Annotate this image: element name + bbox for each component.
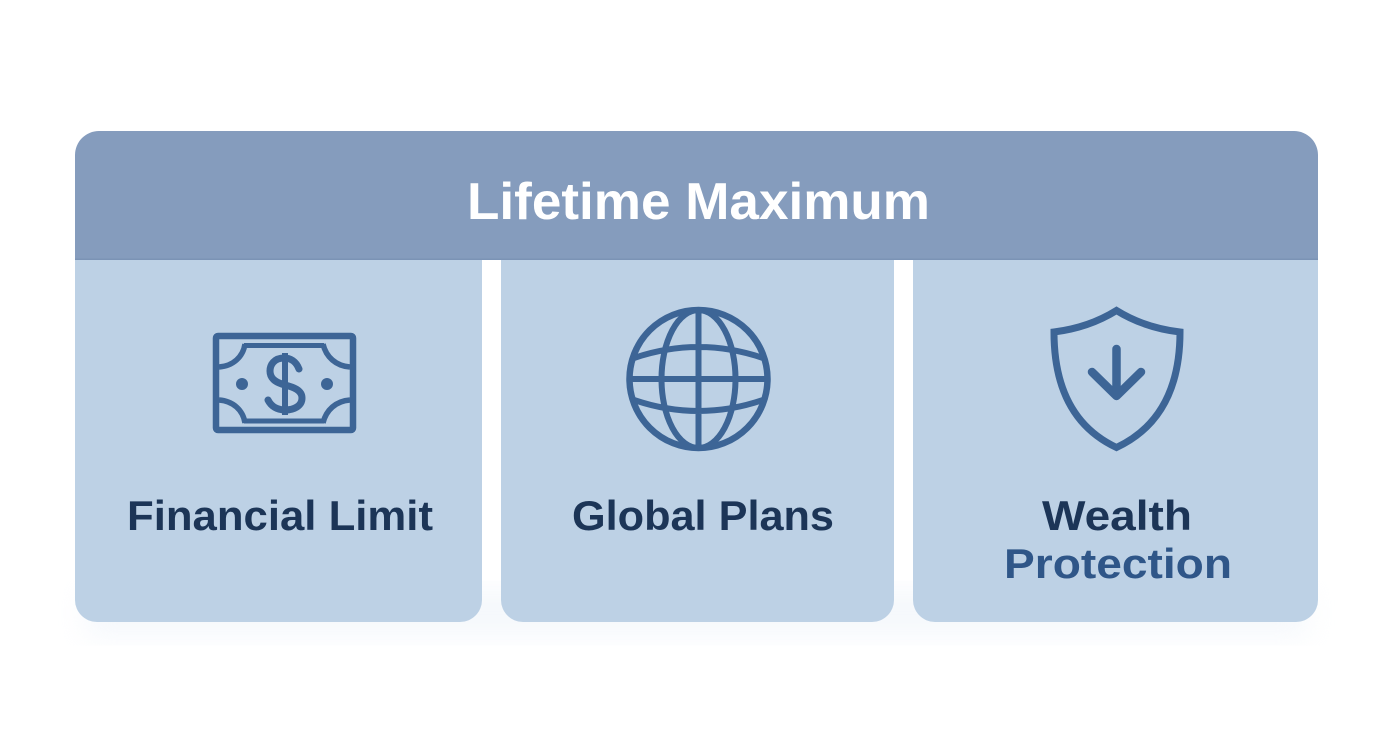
panel: wealth protection bbox=[913, 259, 1318, 622]
icon: shield with down arrow bbox=[1054, 310, 1180, 448]
label: protection: Protection bbox=[1004, 540, 1232, 587]
icon: globe bbox=[629, 310, 768, 448]
panel: global plans bbox=[501, 259, 894, 622]
label: global plans: Global Plans bbox=[572, 492, 834, 539]
title: Lifetime Maximum bbox=[467, 173, 930, 231]
label: wealth: Wealth bbox=[1042, 492, 1192, 539]
panel: financial limit bbox=[75, 259, 482, 622]
icon: banknote bbox=[216, 336, 353, 430]
label: financial limit: Financial Limit bbox=[127, 492, 433, 539]
header banner bbox=[75, 131, 1318, 260]
